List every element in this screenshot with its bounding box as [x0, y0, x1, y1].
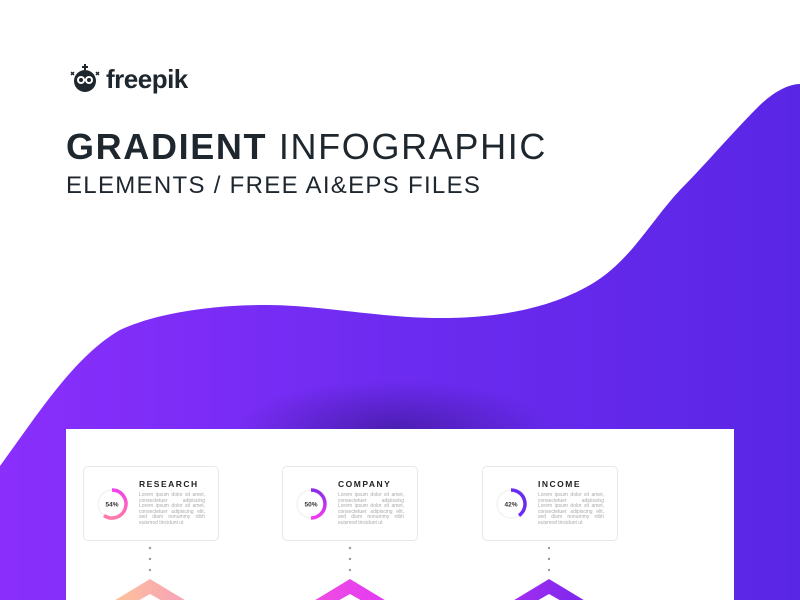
donut: 50%: 50% [304, 502, 318, 508]
donut: 42% [496, 488, 527, 518]
title: GRADIENT INFOGRAPHIC [66, 126, 547, 167]
heading: RESEARCH: RESEARCH [139, 479, 199, 489]
chevron: company [312, 579, 388, 600]
logo: freepik: freepik [106, 64, 188, 94]
donut: 42%: 42% [504, 502, 518, 508]
chevron: research [112, 579, 188, 600]
logo: freepik [70, 64, 188, 94]
donut: 50% [296, 488, 327, 520]
donut: 54%: 54% [105, 502, 119, 508]
connectors and chevrons [116, 546, 584, 600]
text: lorem: Lorem ipsum dolor sit amet, consectetuer adipiscing Lorem ipsum dolor sit amet, consectetuer adipiscing elit, sed diam nonummy nibh euismod tincidunt ut [139, 492, 205, 526]
heading: COMPANY: COMPANY [338, 479, 391, 489]
heading: INCOME: INCOME [538, 479, 581, 489]
chevron: income [511, 579, 587, 600]
icon: freepik mascot [70, 64, 100, 92]
card: research [83, 466, 219, 541]
text: lorem: Lorem ipsum dolor sit amet, consectetuer adipiscing Lorem ipsum dolor sit amet, consectetuer adipiscing elit, sed diam nonummy nibh euismod tincidunt ut [338, 492, 404, 526]
panel: infographic sheet [66, 429, 734, 600]
text: lorem: Lorem ipsum dolor sit amet, consectetuer adipiscing Lorem ipsum dolor sit amet, consectetuer adipiscing elit, sed diam nonummy nibh euismod tincidunt ut [538, 492, 604, 526]
card: income [482, 466, 618, 541]
subtitle: ELEMENTS / FREE AI&EPS FILES [66, 172, 481, 199]
card: company [282, 466, 418, 541]
donut: 54% [98, 488, 128, 520]
